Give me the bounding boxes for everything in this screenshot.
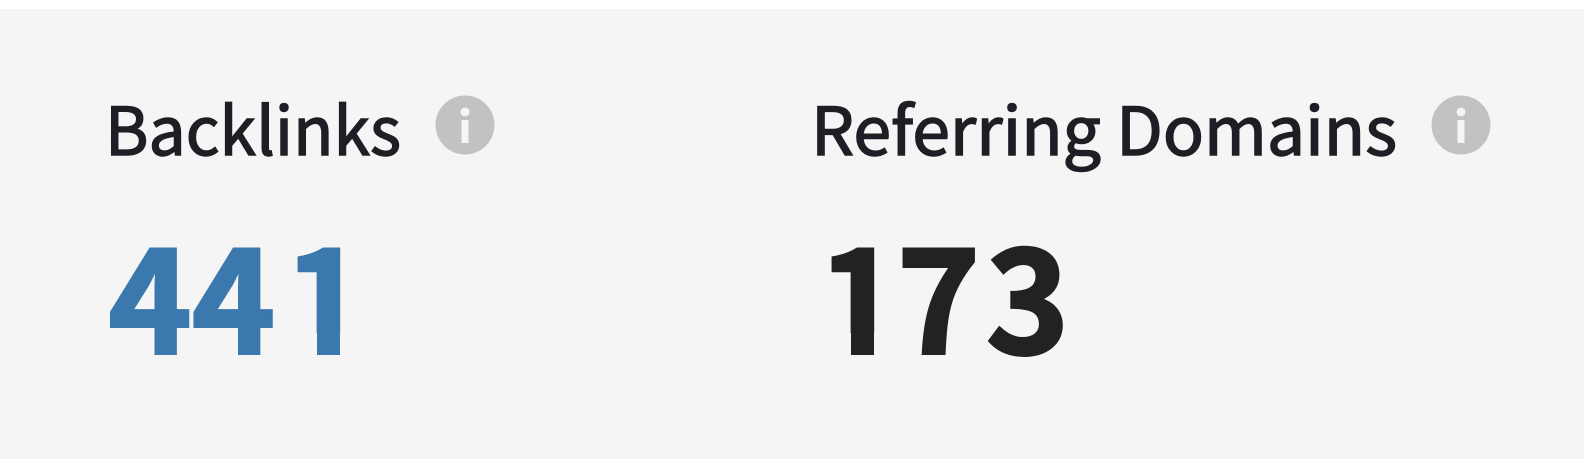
heading: Referring Domains: Referring Domains	[811, 79, 1397, 175]
metric: backlinks	[105, 79, 494, 394]
value: 441: 441	[108, 190, 367, 394]
icon: backlinks info	[436, 96, 494, 154]
metric: referring domains	[811, 79, 1490, 394]
value: 173: 173	[818, 190, 1069, 394]
heading: Backlinks: Backlinks	[105, 79, 401, 175]
icon: referring domains info	[1432, 96, 1490, 154]
